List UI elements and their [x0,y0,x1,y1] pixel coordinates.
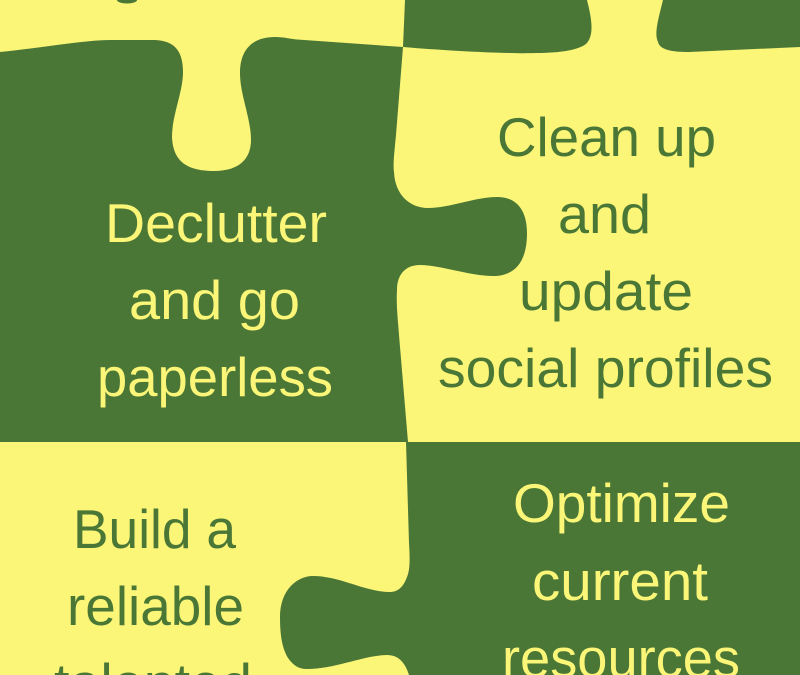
text: declutter and go paperless: paperless [97,346,333,408]
text: declutter and go paperless [97,192,333,408]
text: build a reliable talented: reliable [67,575,244,637]
text: clean up and update social profiles: social profiles [438,337,773,399]
puzzle piece: top right [403,0,800,53]
text: clean up and update social profiles [438,106,773,399]
puzzle piece: optimize [280,442,800,675]
text: declutter and go paperless: and go [129,269,300,331]
text: declutter and go paperless: Declutter [105,192,327,254]
text: optimize current resources: Optimize [513,472,730,534]
text: build a reliable talented: Build a [73,498,236,560]
partial glyph at top edge [117,0,137,4]
text: clean up and update social profiles: and [558,183,651,245]
puzzle piece: declutter [0,37,527,442]
text: optimize current resources: current [532,550,708,612]
text: build a reliable talented [54,498,252,675]
text: clean up and update social profiles: update [519,260,693,322]
text: clean up and update social profiles: Clean up [497,106,716,168]
text: optimize current resources [502,472,740,675]
